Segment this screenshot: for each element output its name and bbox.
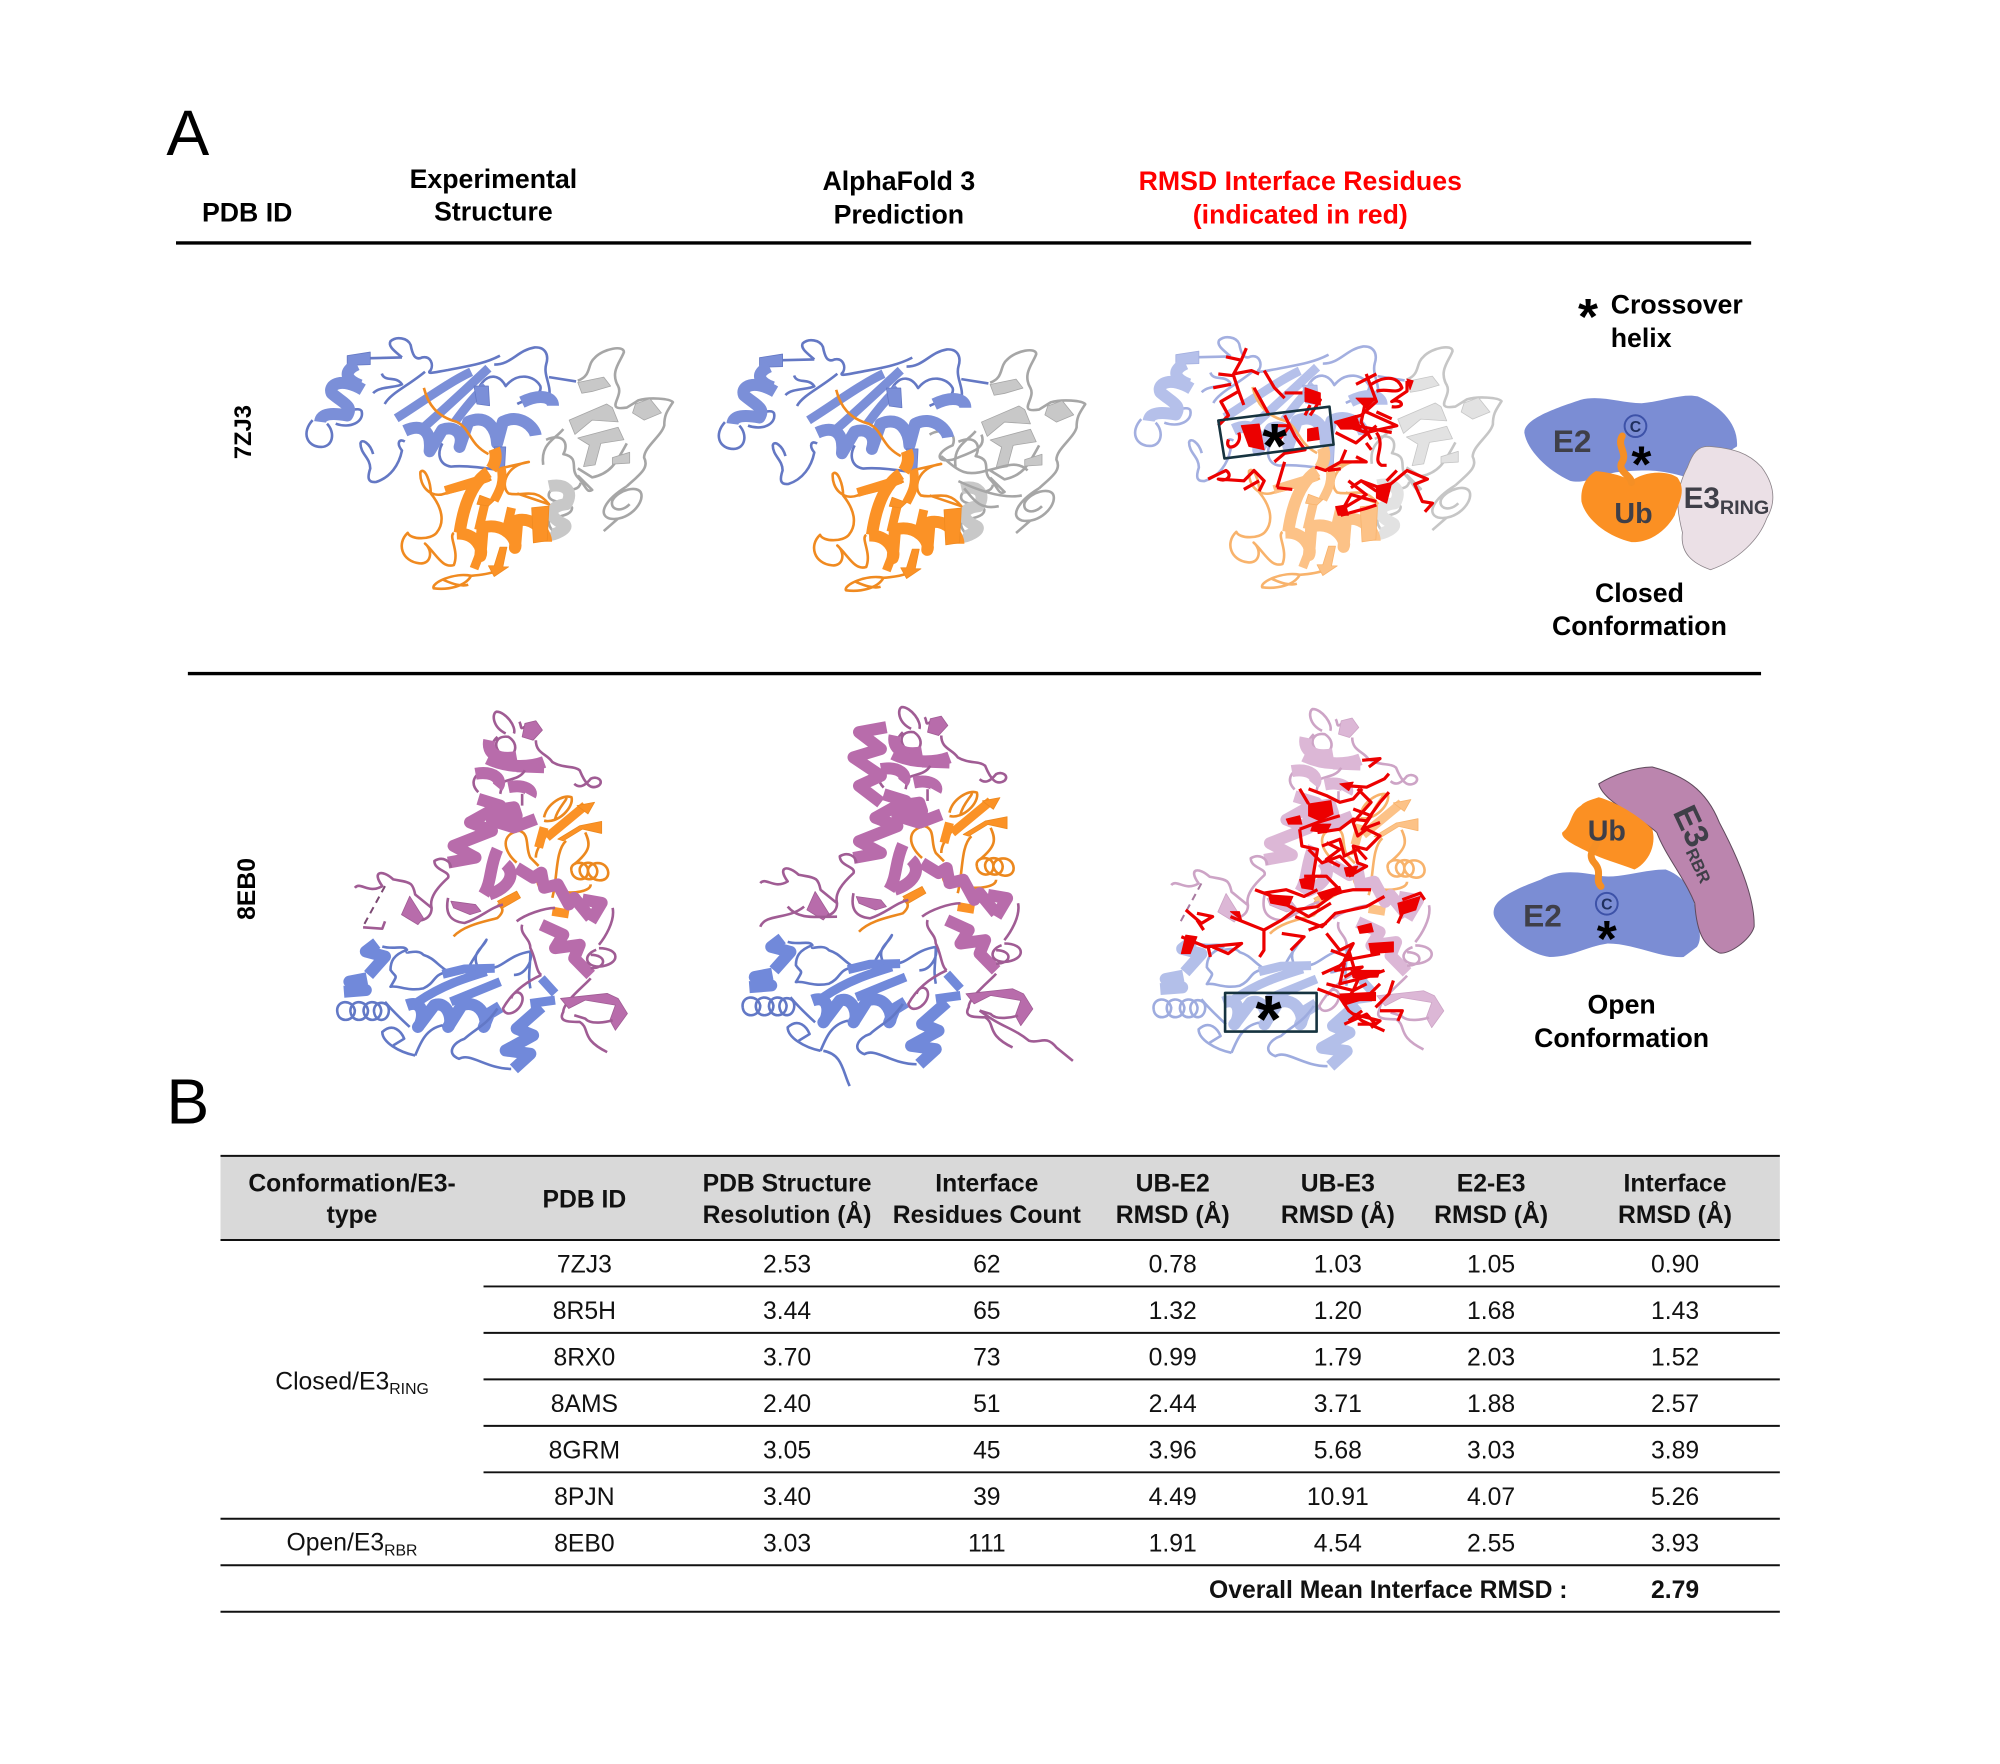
row 8GRM: 3.96 bbox=[1149, 1437, 1197, 1464]
panel label B: B bbox=[166, 1065, 209, 1137]
row 8EB0: 3.93 bbox=[1651, 1530, 1699, 1557]
column heading: AlphaFold 3 Prediction: Prediction bbox=[834, 199, 964, 229]
row 8R5H: 3.44 bbox=[763, 1298, 811, 1325]
crossover helix box 7ZJ3 bbox=[1218, 407, 1334, 458]
caption: closed conformation: Closed bbox=[1595, 578, 1684, 608]
row 8PJN bbox=[554, 1484, 1699, 1511]
structure: 8EB0 experimental bbox=[337, 712, 627, 1069]
row 8EB0: 3.03 bbox=[763, 1530, 811, 1557]
diagram: closed conformation bbox=[1524, 396, 1773, 570]
caption: closed conformation: Conformation bbox=[1552, 611, 1727, 641]
table header: Resolution (Å) bbox=[703, 1201, 872, 1229]
row 7ZJ3: 7ZJ3 bbox=[557, 1252, 612, 1279]
diagram: closed conformation: RING bbox=[1720, 497, 1769, 519]
column heading: RMSD Interface Residues: RMSD Interface Residues bbox=[1139, 166, 1462, 196]
diagram: open conformation bbox=[1494, 767, 1754, 967]
structure: 8EB0 AlphaFold 3 prediction bbox=[743, 707, 1073, 1086]
legend: crossover helix: Crossover bbox=[1611, 289, 1743, 319]
caption: open conformation: Open bbox=[1588, 990, 1656, 1020]
diagram: closed conformation: E3 bbox=[1684, 482, 1720, 515]
table header: PDB ID bbox=[542, 1186, 626, 1213]
table header: RMSD (Å) bbox=[1281, 1201, 1395, 1229]
row 8GRM: 5.68 bbox=[1314, 1437, 1362, 1464]
row 7ZJ3 bbox=[557, 1252, 1699, 1279]
asterisk marker 7ZJ3: * bbox=[1262, 412, 1287, 482]
row 8EB0 bbox=[554, 1530, 1699, 1557]
group label: Open/E3 RBR: Open/E3 bbox=[287, 1529, 384, 1556]
red interface residues 8EB0 bbox=[1181, 759, 1425, 1031]
table header: Interface bbox=[1624, 1171, 1727, 1198]
caption: open conformation: Conformation bbox=[1534, 1023, 1709, 1053]
row 8EB0: 111 bbox=[968, 1530, 1006, 1557]
row 8AMS: 3.71 bbox=[1314, 1391, 1362, 1418]
row 8PJN: 3.40 bbox=[763, 1484, 811, 1511]
row 8R5H: 1.32 bbox=[1149, 1298, 1197, 1325]
diagram: closed conformation: * bbox=[1631, 435, 1651, 493]
structure: 7ZJ3 RMSD interface residues bbox=[1135, 337, 1502, 588]
diagram: open conformation: C bbox=[1601, 897, 1613, 914]
row 7ZJ3: 2.53 bbox=[763, 1252, 811, 1279]
row 8AMS: 2.44 bbox=[1149, 1391, 1197, 1418]
row 8EB0: 4.54 bbox=[1314, 1530, 1362, 1557]
row 8AMS bbox=[551, 1391, 1699, 1418]
row 8R5H: 8R5H bbox=[553, 1298, 616, 1325]
legend: crossover helix: helix bbox=[1611, 323, 1672, 353]
diagram: closed conformation: C bbox=[1630, 419, 1641, 436]
row 8EB0: 2.55 bbox=[1467, 1530, 1515, 1557]
row 8GRM: 3.89 bbox=[1651, 1437, 1699, 1464]
column heading: AlphaFold 3 Prediction: AlphaFold 3 bbox=[822, 166, 975, 196]
row 8EB0: 8EB0 bbox=[554, 1530, 615, 1557]
diagram: open conformation: * bbox=[1597, 909, 1617, 967]
group label: Closed/E3 RING: RING bbox=[389, 1381, 429, 1398]
diagram: closed conformation: Ub bbox=[1614, 498, 1653, 530]
row 8R5H: 65 bbox=[973, 1298, 1001, 1325]
row 8GRM: 8GRM bbox=[549, 1437, 620, 1464]
table header: type bbox=[327, 1202, 377, 1229]
row 8AMS: 2.40 bbox=[763, 1391, 811, 1418]
diagram: open conformation: RBR bbox=[1682, 845, 1714, 886]
diagram: open conformation: Ub bbox=[1588, 815, 1626, 847]
diagram: closed conformation: E2 bbox=[1553, 423, 1592, 459]
row 8GRM: 3.03 bbox=[1467, 1437, 1515, 1464]
row 8RX0: 1.79 bbox=[1314, 1345, 1362, 1372]
group label: Closed/E3 RING: Closed/E3 bbox=[275, 1368, 389, 1395]
table header: Conformation/E3- bbox=[248, 1171, 456, 1198]
row 8GRM: 45 bbox=[973, 1437, 1001, 1464]
group label: Open/E3 RBR: RBR bbox=[384, 1542, 417, 1559]
row label 7ZJ3: 7ZJ3 bbox=[231, 405, 257, 459]
row 8GRM bbox=[549, 1437, 1699, 1464]
table header: E2-E3 bbox=[1457, 1171, 1525, 1198]
column heading: Experimental Structure: Experimental bbox=[410, 164, 577, 194]
row 8GRM: 3.05 bbox=[763, 1437, 811, 1464]
row 8RX0: 3.70 bbox=[763, 1345, 811, 1372]
row 8EB0: 1.91 bbox=[1149, 1530, 1197, 1557]
row 8RX0 bbox=[553, 1345, 1699, 1372]
row 8R5H bbox=[553, 1298, 1699, 1325]
table header: RMSD (Å) bbox=[1434, 1201, 1548, 1229]
row 8PJN: 4.49 bbox=[1149, 1484, 1197, 1511]
row 8PJN: 5.26 bbox=[1651, 1484, 1699, 1511]
table header: UB-E2 bbox=[1136, 1171, 1210, 1198]
crossover helix box 8EB0 bbox=[1225, 993, 1317, 1032]
row 8RX0: 8RX0 bbox=[553, 1345, 615, 1372]
table header: PDB Structure bbox=[703, 1171, 872, 1198]
legend: crossover helix: * bbox=[1578, 287, 1598, 345]
row 7ZJ3: 0.90 bbox=[1651, 1252, 1699, 1279]
column heading: RMSD Interface Residues: (indicated in red) bbox=[1193, 199, 1408, 229]
row 8PJN: 10.91 bbox=[1307, 1484, 1369, 1511]
table header bbox=[221, 1156, 1780, 1240]
column heading: PDB ID: PDB ID bbox=[202, 197, 292, 227]
structure: 7ZJ3 AlphaFold 3 prediction bbox=[719, 340, 1085, 591]
table header: RMSD (Å) bbox=[1116, 1201, 1230, 1229]
row 8RX0: 0.99 bbox=[1149, 1345, 1197, 1372]
row 8RX0: 2.03 bbox=[1467, 1345, 1515, 1372]
row 7ZJ3: 0.78 bbox=[1149, 1252, 1197, 1279]
diagram: open conformation: E2 bbox=[1523, 898, 1562, 934]
table header: UB-E3 bbox=[1301, 1171, 1375, 1198]
overall mean row: Overall Mean Interface RMSD : bbox=[1209, 1577, 1568, 1604]
row 8RX0: 1.52 bbox=[1651, 1345, 1699, 1372]
diagram: open conformation: E3 bbox=[1665, 800, 1716, 853]
row 8R5H: 1.68 bbox=[1467, 1298, 1515, 1325]
panel label A: A bbox=[166, 97, 209, 169]
table header: RMSD (Å) bbox=[1618, 1201, 1732, 1229]
table header: Residues Count bbox=[893, 1202, 1081, 1229]
legend: crossover helix bbox=[1578, 287, 1743, 353]
asterisk marker 8EB0: * bbox=[1256, 982, 1283, 1057]
row 8R5H: 1.43 bbox=[1651, 1298, 1699, 1325]
row 8PJN: 39 bbox=[973, 1484, 1001, 1511]
column heading: Experimental Structure: Structure bbox=[434, 197, 553, 227]
row 7ZJ3: 1.05 bbox=[1467, 1252, 1515, 1279]
row 8R5H: 1.20 bbox=[1314, 1298, 1362, 1325]
structure: 7ZJ3 experimental bbox=[306, 338, 673, 589]
row label 8EB0: 8EB0 bbox=[234, 858, 261, 920]
row 8RX0: 73 bbox=[973, 1345, 1001, 1372]
row 8AMS: 2.57 bbox=[1651, 1391, 1699, 1418]
table: RMSD results bbox=[221, 1156, 1780, 1612]
row 8AMS: 1.88 bbox=[1467, 1391, 1515, 1418]
row 7ZJ3: 62 bbox=[973, 1252, 1001, 1279]
structure: 8EB0 RMSD interface residues bbox=[1154, 709, 1444, 1066]
row 8AMS: 51 bbox=[973, 1391, 1001, 1418]
overall mean row: 2.79 bbox=[1651, 1577, 1699, 1604]
row 8PJN: 8PJN bbox=[554, 1484, 615, 1511]
row 8PJN: 4.07 bbox=[1467, 1484, 1515, 1511]
table header: Interface bbox=[935, 1171, 1038, 1198]
red interface residues 7ZJ3 bbox=[1208, 348, 1433, 515]
row 7ZJ3: 1.03 bbox=[1314, 1252, 1362, 1279]
row 8AMS: 8AMS bbox=[551, 1391, 618, 1418]
